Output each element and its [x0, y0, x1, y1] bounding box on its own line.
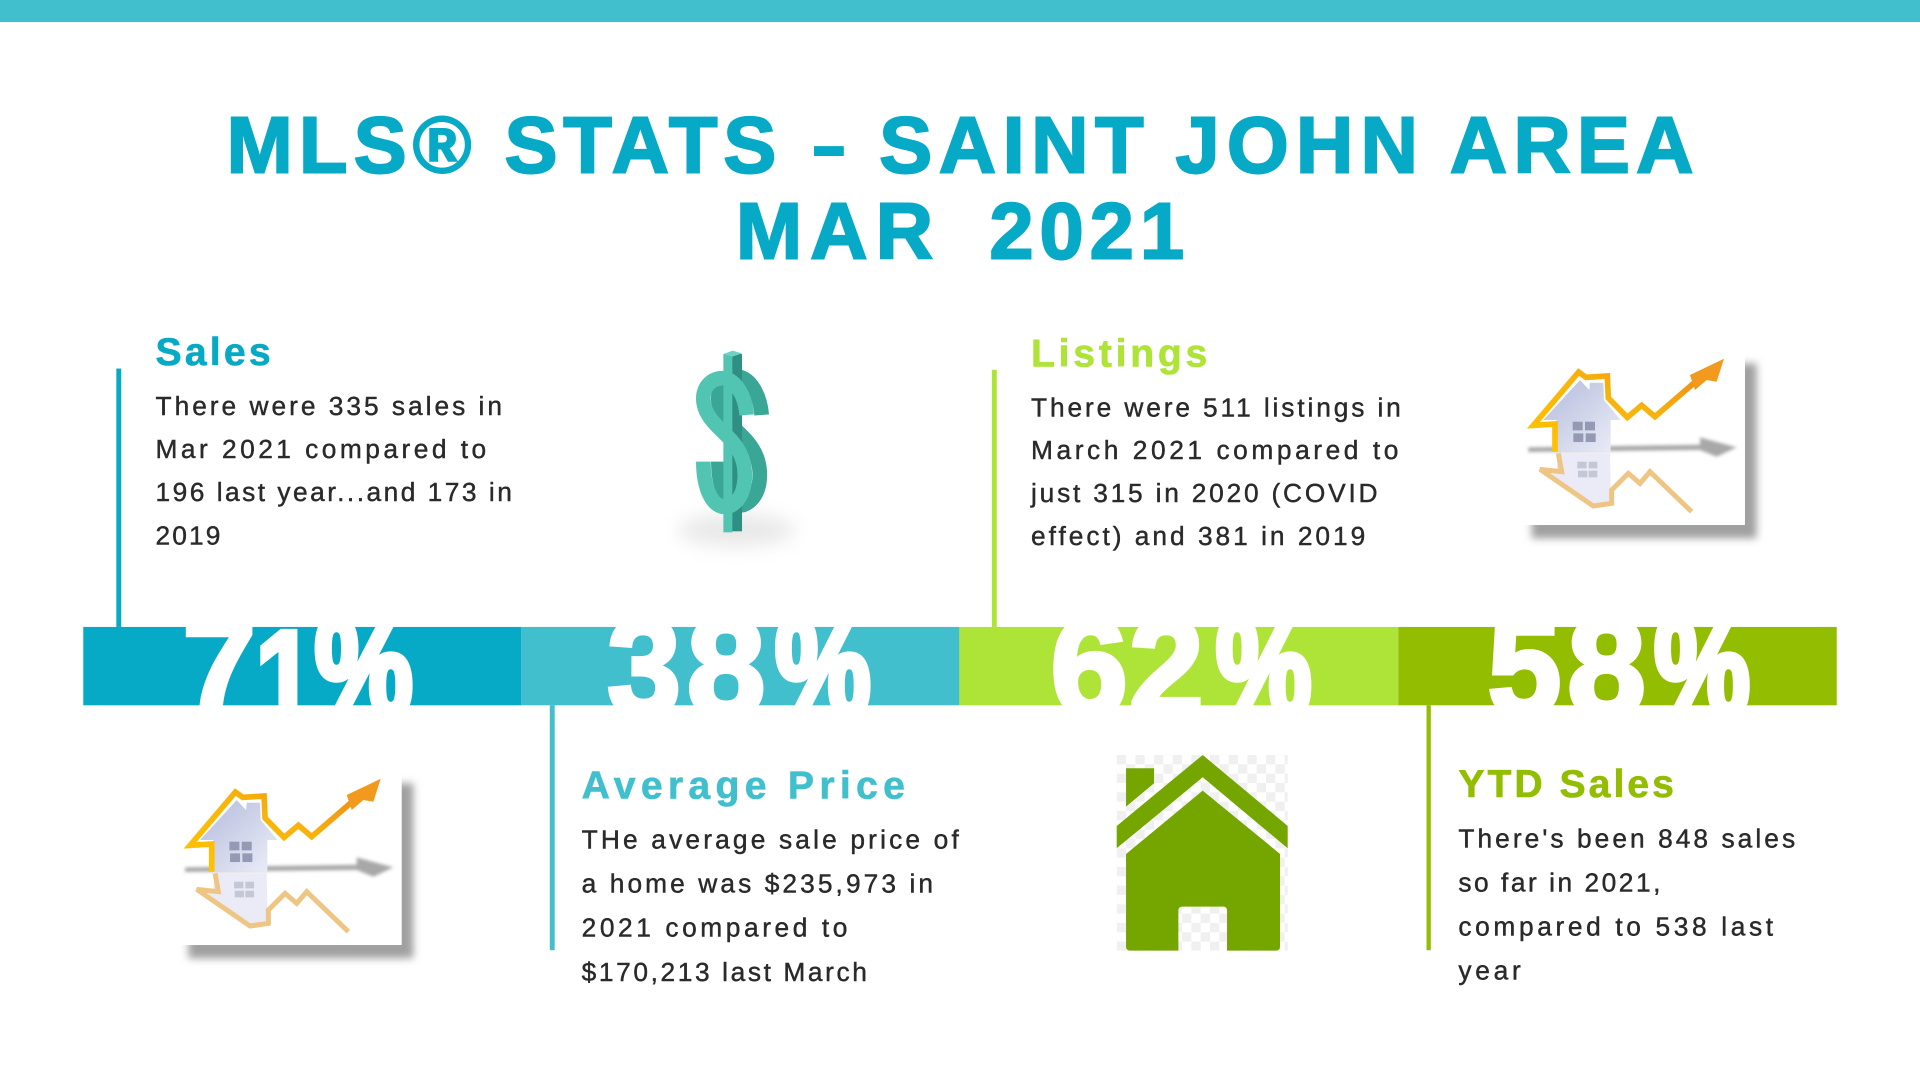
segment: listings 62% [959, 589, 1398, 745]
segment: YTD sales 58%: 8 [1567, 589, 1646, 745]
icon: green house [1117, 755, 1288, 951]
average price body text: a home was $235,973 in [582, 869, 933, 899]
title: – [813, 101, 845, 190]
average price body text: 2021 compared to [582, 913, 847, 943]
panel: listings [992, 333, 1401, 627]
segment: sales 71% [83, 589, 521, 757]
segment: listings 62%: 2 [1129, 589, 1204, 745]
sales body text: 2019 [156, 520, 220, 550]
segment: listings 62%: 6 [1051, 589, 1128, 745]
average price body text: $170,213 last March [582, 957, 867, 987]
panel: average price [550, 705, 959, 987]
listings body text: effect) and 381 in 2019 [1031, 521, 1365, 551]
segment: YTD sales 58% [1398, 589, 1837, 745]
segment: YTD sales 58%: 5 [1488, 589, 1561, 745]
title: AREA [1450, 101, 1693, 190]
percentage band [83, 589, 1837, 757]
panel: sales [116, 331, 512, 627]
YTD sales body text: so far in 2021, [1458, 867, 1660, 897]
YTD sales heading: YTD Sales [1458, 763, 1674, 806]
average price body text: THe average sale price of [582, 825, 959, 855]
icon: house with rising arrow, top right [1520, 353, 1757, 538]
sales connector line [116, 369, 121, 627]
YTD sales body text [1458, 823, 1795, 986]
segment: average price 38%: 8 [687, 589, 765, 745]
title: STATS [504, 101, 776, 190]
listings body text [1030, 392, 1401, 551]
listings connector line [992, 370, 997, 627]
listings body text: March 2021 compared to [1031, 435, 1398, 465]
segment: average price 38%: % [775, 589, 871, 745]
sales body text [156, 391, 512, 550]
title: MAR [736, 186, 933, 275]
YTD sales body text: year [1458, 956, 1521, 986]
title: 2021 [989, 186, 1184, 275]
average price body text [582, 825, 959, 987]
YTD sales body text: compared to 538 last [1458, 912, 1774, 942]
top band [0, 0, 1920, 22]
segment: sales 71%: 1 [255, 601, 316, 757]
listings heading: Listings [1031, 333, 1207, 376]
average price connector line [550, 705, 555, 950]
title [227, 101, 1693, 275]
segment: average price 38%: 3 [607, 589, 681, 745]
listings body text: just 315 in 2020 (COVID [1030, 478, 1378, 508]
segment: average price 38% [521, 589, 959, 745]
icon: house with rising arrow, bottom left [177, 773, 413, 958]
segment: sales 71%: 7 [182, 589, 256, 745]
title: MLS® [227, 101, 471, 190]
segment: listings 62%: % [1216, 589, 1311, 745]
listings body text: There were 511 listings in [1031, 392, 1401, 422]
YTD sales body text: There's been 848 sales [1458, 823, 1795, 853]
icon: 3D dollar sign [678, 351, 795, 547]
title: SAINT [879, 101, 1144, 190]
title: JOHN [1176, 101, 1418, 190]
YTD sales connector line [1427, 705, 1431, 950]
sales body text: There were 335 sales in [156, 391, 502, 421]
segment: sales 71%: % [315, 589, 413, 745]
segment: YTD sales 58%: % [1654, 589, 1750, 745]
average price heading: Average Price [582, 764, 905, 807]
panel: YTD sales [1427, 705, 1795, 986]
sales body text: Mar 2021 compared to [156, 434, 486, 464]
sales heading: Sales [156, 331, 271, 374]
sales body text: 196 last year...and 173 in [156, 477, 512, 507]
